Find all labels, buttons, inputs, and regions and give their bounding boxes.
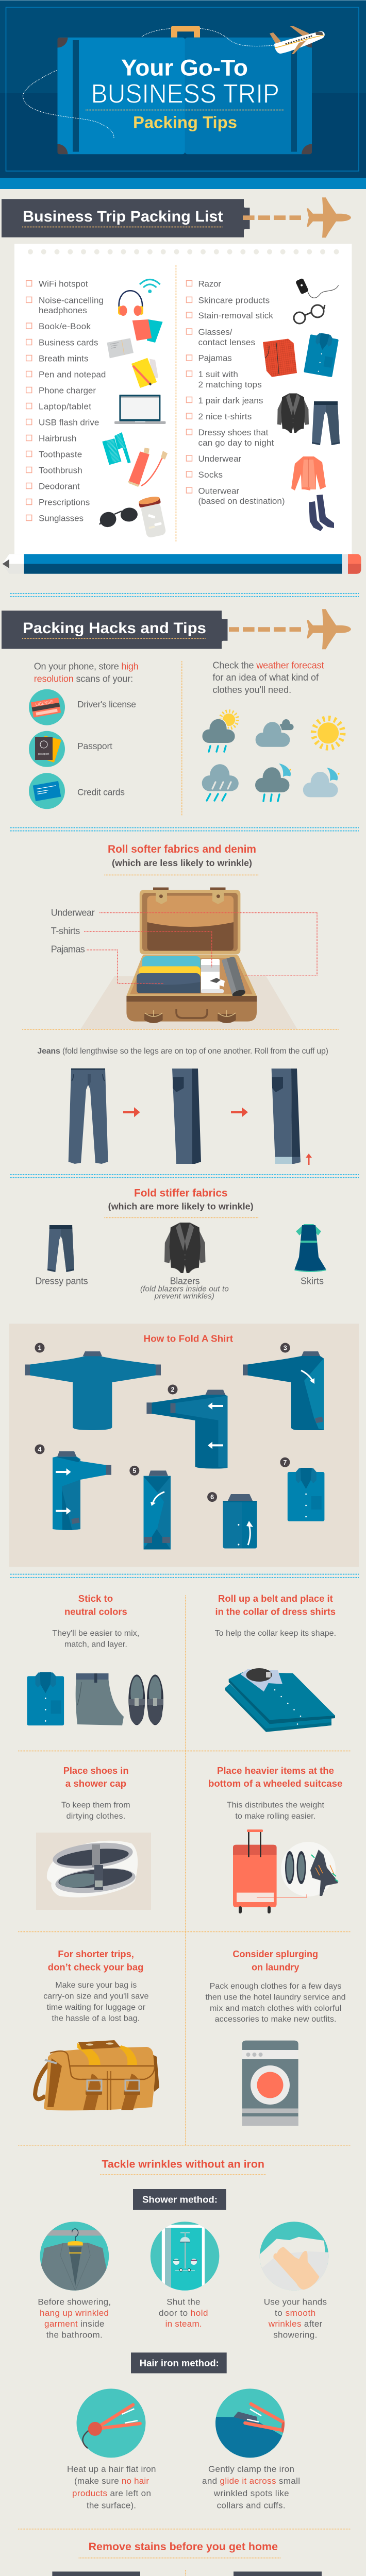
checklist: left column: Toothbrush (39, 466, 82, 475)
panel: packing list notepad (14, 244, 352, 558)
panel: hair iron method (67, 2352, 300, 2511)
checklist: left column: Noise-cancelling (39, 295, 104, 305)
stain tip: hairspray (234, 2571, 322, 2576)
icon: shower door (151, 2222, 219, 2292)
tip: high resolution scans: Credit cards (77, 787, 125, 797)
heading: How to Fold A Shirt (143, 1333, 233, 1344)
checklist: right column: Razor (198, 279, 221, 289)
icon: blue shirt (304, 331, 339, 377)
title (86, 55, 284, 131)
captions: Gently clamp the iron (208, 2464, 294, 2474)
captions: and glide it across small (202, 2476, 300, 2486)
callout labels: Pajamas (51, 944, 85, 955)
dotted flight path (23, 28, 274, 138)
checklist: right column (187, 279, 285, 506)
step numbers: 3 (284, 1345, 287, 1352)
tip: belt in collar: Roll up a belt and place it (218, 1593, 333, 1604)
checklist: right column: Stain-removal stick (198, 311, 273, 320)
tip: high resolution scans: resolution scans of your: (34, 673, 133, 684)
step numbers (35, 1343, 290, 1502)
item: blazers: Blazers (170, 1276, 200, 1286)
icon: duffel bag (35, 2040, 159, 2110)
icon: business cards (107, 338, 134, 358)
stain tip: shaving cream (52, 2571, 140, 2576)
step numbers: 6 (210, 1494, 214, 1501)
icon: pencil (2, 554, 361, 574)
callout labels: Underwear (51, 908, 95, 918)
icon: razor (295, 278, 339, 298)
checklist: right column: Pajamas (198, 353, 232, 363)
tip: don't check your bag: time waiting for luggage or (47, 2003, 146, 2012)
icon: night rain (255, 764, 291, 801)
icon: glasses (294, 305, 325, 324)
checklist: right column: 2 matching tops (198, 380, 262, 389)
icon: passport: passport (38, 753, 49, 756)
captions: (make sure no hair (74, 2476, 149, 2486)
step 2 shirt (146, 1390, 228, 1468)
tip: high resolution scans: On your phone, store high (34, 662, 139, 672)
tip: don't check your bag: For shorter trips, (58, 1948, 134, 1959)
checklist: right column: Glasses/ (198, 327, 232, 337)
tip: heavier items at bottom: to make rolling easier. (235, 1812, 315, 1821)
checklist: right column: contact lenses (198, 337, 255, 347)
title: BUSINESS TRIP (91, 79, 279, 109)
panel: header (0, 0, 366, 189)
callout labels (51, 908, 95, 955)
panel: how to fold a shirt (9, 1324, 359, 1567)
jeans: laid flat (69, 1069, 108, 1164)
panel: shower method (36, 2189, 330, 2340)
step 4 shirt (53, 1451, 111, 1530)
tip: don't check your bag: don’t check your bag (48, 1961, 143, 1972)
section heading: Packing Hacks and Tips (2, 609, 351, 649)
checklist: left column: Book/e-Book (39, 321, 91, 331)
arrow (231, 1107, 248, 1117)
icon: jeans (312, 401, 340, 445)
checklist: right column: Dressy shoes that (198, 428, 269, 437)
tip: don't check your bag: the hassle of a lost bag. (52, 2014, 140, 2023)
tip: belt in collar: in the collar of dress shirts (215, 1606, 336, 1617)
checklist: left column: USB flash drive (39, 417, 99, 428)
captions: door to hold (159, 2308, 208, 2318)
checklist: right column: Outerwear (198, 486, 240, 496)
step 7 shirt (288, 1468, 324, 1521)
tip: heavier items at bottom: bottom of a wheeled suitcase (208, 1778, 342, 1789)
title: Your Go-To (121, 55, 248, 80)
captions (67, 2464, 300, 2511)
checklist: left column: Breath mints (39, 353, 89, 364)
tip: weather forecast (202, 660, 343, 801)
icon: rain with sun (202, 711, 238, 752)
title: Packing Tips (133, 113, 237, 131)
checklist: left column: WiFi hotspot (39, 279, 88, 289)
icon: toothpaste and toothbrush (128, 448, 168, 487)
checklist: right column: 1 suit with (198, 369, 238, 379)
item: blazers (140, 1223, 229, 1301)
illustration: jeans rolling steps (69, 1069, 312, 1165)
icon: driver's license: LICENSE (35, 699, 53, 707)
step 6 shirt (223, 1494, 257, 1549)
step 3 shirt (243, 1351, 324, 1430)
item: blazers: (fold blazers inside out to (140, 1285, 229, 1293)
label (133, 2189, 226, 2210)
icon: headphones (118, 291, 143, 316)
tip: splurge on laundry: on laundry (252, 1961, 300, 1972)
icon: loafers (128, 1674, 163, 1725)
icon: socks (309, 495, 334, 531)
tip: don't check your bag: carry-on size and you'll save (43, 1992, 148, 2001)
icon: driver's license (29, 689, 65, 725)
checklist: left column: Sunglasses (39, 513, 84, 523)
illustration: packed suitcase (51, 887, 317, 1029)
icon: airplane (270, 26, 325, 54)
suitcase base with rolled clothes (126, 955, 257, 1023)
tip: neutral colors: They'll be easier to mix, (52, 1629, 139, 1638)
tip: weather forecast: Check the weather forecast (212, 660, 324, 670)
captions: products are left on (72, 2488, 151, 2498)
heading: fold stiffer fabrics: (which are more likely to wrinkle) (108, 1201, 254, 1211)
icon: credit card (29, 773, 65, 809)
step numbers: 7 (283, 1459, 287, 1466)
icon: comb (102, 432, 131, 465)
tip: don't check your bag (35, 1948, 159, 2110)
tip: splurge on laundry: accessories to make new outfits. (215, 2015, 336, 2024)
tip: shoes in a shower cap (36, 1765, 151, 1910)
icon: laptop (114, 395, 166, 424)
icon: books (132, 319, 163, 343)
captions: wrinkles after (268, 2319, 323, 2329)
caption: jeans rolling: Jeans (fold lengthwise so the legs are on top of one another. Roll from the cuff up) (37, 1047, 328, 1056)
icon: pill bottle (138, 495, 168, 538)
tip: neutral colors: neutral colors (64, 1606, 127, 1617)
step 1 shirt (25, 1351, 161, 1430)
tip: splurge on laundry: Consider splurging (232, 1948, 318, 1959)
checklist: left column: Business cards (39, 338, 98, 347)
checklist: left column: Toothpaste (39, 449, 82, 460)
tip: splurge on laundry (205, 1948, 345, 2126)
item: skirts: Skirts (301, 1276, 324, 1286)
checklist: left column: Prescriptions (39, 498, 90, 507)
captions: Use your hands (264, 2297, 327, 2307)
tip: splurge on laundry: then use the hotel laundry service and (205, 1993, 345, 2002)
checklist: left column: headphones (39, 306, 87, 315)
tip: splurge on laundry: mix and match clothes with colorful (210, 2004, 341, 2013)
tip: shoes in a shower cap: Place shoes in (63, 1765, 129, 1776)
heading: fold stiffer fabrics: Fold stiffer fabrics (134, 1187, 228, 1199)
illustration: shoes in cap (36, 1833, 151, 1910)
icon: shirt (27, 1672, 64, 1725)
tip: high resolution scans: Driver's license (77, 699, 136, 709)
illustration: wheeled suitcase with shoes (233, 1829, 338, 1913)
step 5 shirt (143, 1470, 171, 1549)
heading: roll softer fabrics: (which are less likely to wrinkle) (112, 858, 252, 868)
icon: sun (313, 718, 343, 748)
captions: showering. (273, 2330, 317, 2340)
icon: cloud with dark cloud (255, 719, 294, 747)
checklist: left column: Deodorant (39, 481, 80, 492)
heading: tackle wrinkles: Tackle wrinkles without an iron (102, 2158, 264, 2170)
checklist: left column: Phone charger (39, 385, 96, 396)
icon: folder and pencil (131, 358, 158, 388)
icon: cloudy night (303, 768, 339, 798)
captions: to smooth (275, 2308, 315, 2318)
checklist: right column: 1 pair dark jeans (198, 396, 263, 405)
icon: blazer (277, 394, 309, 433)
tip: splurge on laundry: Pack enough clothes for a few days (210, 1982, 341, 1991)
icon: coral jacket (291, 456, 326, 490)
step numbers: 2 (171, 1386, 175, 1393)
icon: pajamas (263, 339, 297, 377)
tip: high resolution scans: Passport (77, 741, 112, 751)
tip: heavier items at bottom: Place heavier items at the (217, 1765, 334, 1776)
icon: heavy rain (202, 764, 239, 801)
section heading: Business Trip Packing List: Business Trip Packing List (23, 208, 223, 225)
tip: shoes in a shower cap: To keep them from (61, 1801, 130, 1810)
step numbers: 4 (38, 1446, 42, 1453)
arrow (306, 1154, 312, 1165)
captions: the bathroom. (46, 2330, 103, 2340)
item: blazers: prevent wrinkles) (154, 1292, 214, 1301)
heading: fold stiffer fabrics (104, 1187, 259, 1217)
checklist: left column (26, 279, 106, 523)
section heading: Packing Hacks and Tips: Packing Hacks and Tips (23, 620, 206, 637)
label (52, 2571, 140, 2576)
label: Shower method: (142, 2194, 218, 2205)
label (234, 2571, 322, 2576)
callout labels: T-shirts (51, 926, 80, 936)
jeans: cuff rolled (272, 1069, 301, 1164)
tip: belt in collar (215, 1593, 336, 1732)
heading: remove stains: Remove stains before you get home (89, 2540, 278, 2553)
captions: Before showering, (38, 2297, 111, 2307)
captions: collars and cuffs. (217, 2501, 286, 2511)
captions: Shut the (167, 2297, 200, 2307)
captions: hang up wrinkled (40, 2308, 109, 2318)
icon: hand smoothing (258, 2222, 330, 2293)
icon: flat iron (76, 2388, 145, 2458)
captions (38, 2297, 327, 2340)
icon: wifi (140, 279, 160, 293)
step numbers: 5 (132, 1467, 136, 1475)
heading: roll softer fabrics: Roll softer fabrics and denim (108, 843, 256, 855)
label (131, 2352, 227, 2373)
icon: iron on collar (215, 2388, 285, 2458)
tip: don't check your bag: Make sure your bag is (55, 1981, 137, 1990)
tip: heavier items at bottom (208, 1765, 342, 1913)
item: skirts (294, 1224, 326, 1286)
callout lines (84, 913, 317, 984)
tip: high resolution scans (29, 662, 139, 809)
tip: neutral colors (27, 1593, 163, 1725)
checklist: left column: Laptop/tablet (39, 402, 91, 411)
icon: washing machine (242, 2041, 298, 2126)
icon: stacked shirts with belt (225, 1668, 335, 1732)
tip: shoes in a shower cap: a shower cap (65, 1778, 126, 1789)
tip: belt in collar: To help the collar keep its shape. (215, 1629, 336, 1638)
jeans: folded lengthwise (172, 1069, 201, 1164)
tip: shoes in a shower cap: dirtying clothes. (66, 1812, 125, 1821)
tip: neutral colors: match, and layer. (64, 1640, 127, 1649)
tip: neutral colors: Stick to (78, 1593, 113, 1604)
tip: weather forecast: clothes you'll need. (212, 685, 291, 695)
item: dressy pants (35, 1225, 88, 1286)
captions: Heat up a hair flat iron (67, 2464, 156, 2474)
suitcase lid (140, 887, 240, 954)
captions: the surface). (87, 2501, 136, 2511)
checklist: right column: Socks (198, 470, 223, 480)
section heading: Business Trip Packing List (2, 197, 351, 238)
checklist: right column: can go day to night (198, 438, 274, 448)
arrow (123, 1107, 140, 1117)
suitcase illustration (58, 26, 312, 154)
icon: hanging jacket (40, 2222, 109, 2291)
captions: wrinkled spots like (213, 2488, 289, 2498)
checklist: right column: Skincare products (198, 295, 270, 305)
checklist: left column: Hairbrush (39, 434, 76, 443)
checklist: right column: Underwear (198, 454, 242, 464)
label: Hair iron method: (140, 2358, 219, 2368)
tip: weather forecast: for an idea of what kind of (212, 672, 319, 683)
item: dressy pants: Dressy pants (35, 1276, 88, 1286)
checklist: right column: 2 nice t-shirts (198, 412, 252, 421)
icon: passport (29, 731, 65, 767)
captions: in steam. (165, 2319, 202, 2329)
icon: shorts (76, 1673, 124, 1725)
icon: sunglasses (98, 507, 138, 529)
captions: garment inside (44, 2319, 104, 2329)
checklist: left column: Pen and notepad (39, 370, 106, 379)
heading: roll softer fabrics (104, 843, 259, 875)
step numbers: 1 (38, 1345, 42, 1352)
tip: heavier items at bottom: This distributes the weight (227, 1801, 325, 1810)
checklist: right column: (based on destination) (198, 496, 285, 506)
